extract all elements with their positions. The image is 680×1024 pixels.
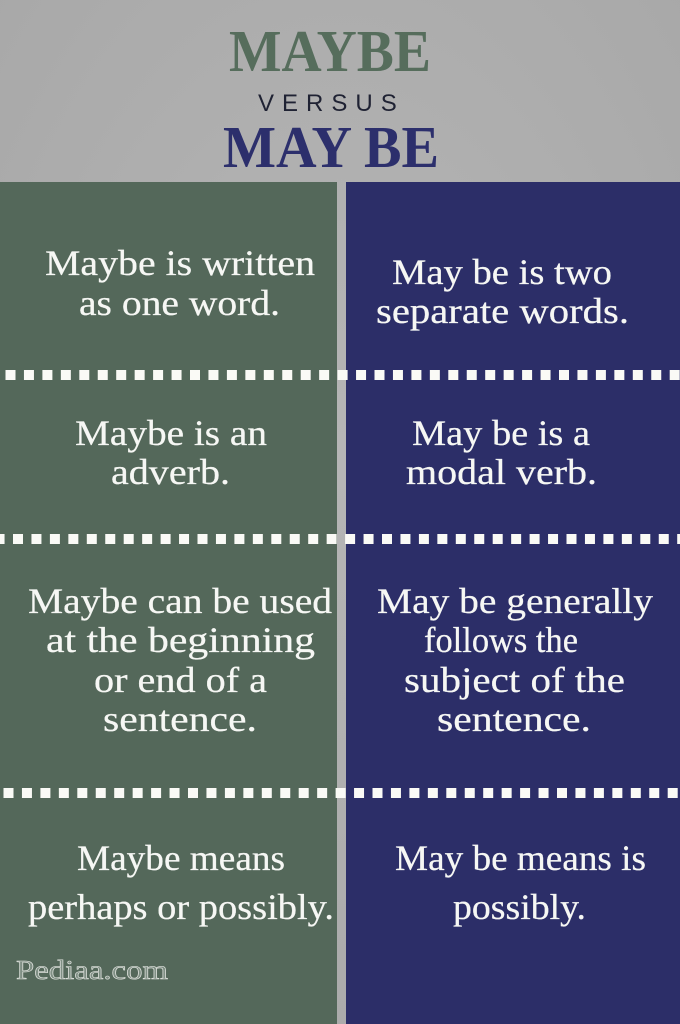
panel: maybe column (0, 182, 337, 1024)
text: meaning, may be: possibly. (453, 887, 586, 927)
text: written form, maybe (45, 243, 315, 323)
text: position, maybe: Maybe can be used (28, 581, 332, 621)
dotted divider 3 (0, 788, 680, 798)
text: meaning, maybe (28, 838, 334, 927)
text: position, maybe: sentence. (103, 699, 257, 739)
text: meaning, may be (395, 838, 646, 927)
text: position, may be: subject of the (404, 660, 625, 700)
text: written form, may be (376, 252, 629, 331)
heading: May be: MAY BE (223, 114, 439, 180)
text: position, may be: May be generally (377, 581, 653, 621)
text: position, maybe (28, 581, 332, 739)
text: position, may be: sentence. (437, 699, 591, 739)
dotted divider 2 (0, 534, 680, 544)
text: position, may be (377, 581, 653, 739)
text: position, may be: follows the (424, 620, 578, 660)
text: written form, may be: May be is two (392, 252, 612, 292)
logo: Pediaa.com: Pediaa.com (16, 955, 168, 985)
heading: Maybe: MAYBE (229, 18, 431, 84)
text: meaning, maybe: perhaps or possibly. (28, 887, 334, 927)
text: part of speech, may be: modal verb. (406, 452, 597, 492)
heading: versus: VERSUS (258, 90, 405, 117)
dotted divider 1 (0, 370, 680, 380)
text: written form, maybe: Maybe is written (45, 243, 315, 283)
text: part of speech, maybe: adverb. (111, 452, 230, 492)
text: part of speech, maybe (75, 413, 267, 492)
text: position, maybe: or end of a (94, 660, 267, 700)
text: part of speech, may be (406, 413, 597, 492)
text: position, maybe: at the beginning (46, 620, 315, 660)
text: meaning, may be: May be means is (395, 838, 646, 878)
text: written form, maybe: as one word. (79, 283, 280, 323)
text: meaning, maybe: Maybe means (77, 838, 285, 878)
text: part of speech, may be: May be is a (412, 413, 590, 453)
text: written form, may be: separate words. (376, 291, 629, 331)
title (223, 18, 439, 180)
panel: may be column (346, 182, 680, 1024)
text: part of speech, maybe: Maybe is an (75, 413, 267, 453)
